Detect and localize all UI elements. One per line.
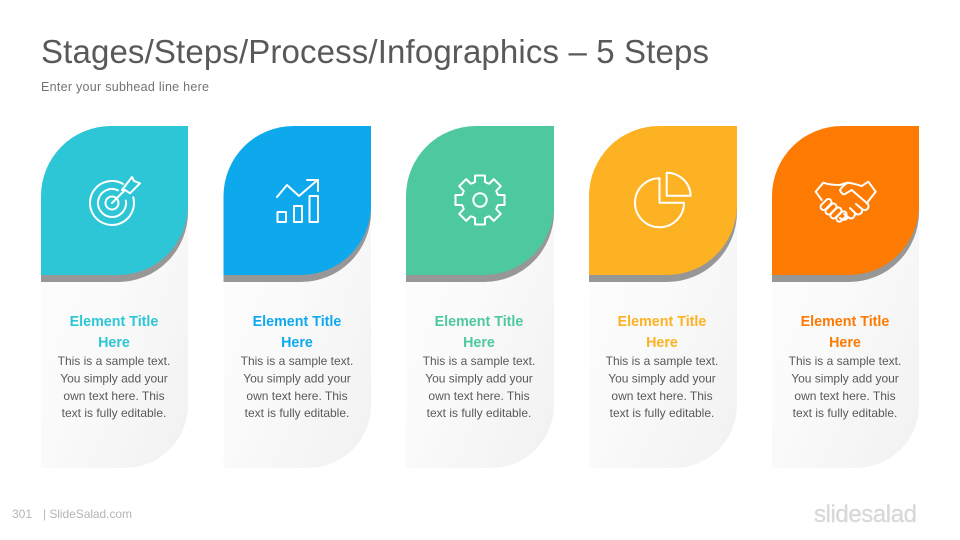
step 5 title: Here [829,335,861,351]
step 5 text: own text here. This [794,389,896,403]
step 4 title: Element Title [618,314,706,330]
colour leaf 4 [589,126,737,275]
step 3 text: text is fully editable. [427,406,531,420]
step 4 title: Here [646,335,678,351]
colour leaf 5 [772,126,919,275]
card shadow 1 [41,200,188,282]
step 2 text: You simply add your [243,371,351,385]
footer site name: | SlideSalad.com [43,507,132,521]
step 2 text: own text here. This [246,389,348,403]
colour leaf 3 [406,126,554,275]
step 2 text: text is fully editable. [245,406,349,420]
step 3 text: This is a sample text. [423,354,535,368]
step 2 title: Element Title [253,314,341,330]
step 1 text: own text here. This [63,389,165,403]
panel: step 5 [772,126,919,468]
step 4 text: own text here. This [611,389,713,403]
icon: handshake [816,182,876,223]
step 3 title: Here [463,335,495,351]
subhead: Enter your subhead line here [41,80,209,94]
panel: step 2 [224,126,371,468]
step 5 title: Element Title [801,314,889,330]
step 3 title: Element Title [435,314,523,330]
card shadow 5 [772,200,919,282]
card background 5 [772,126,919,468]
colour leaf 2 [224,126,371,275]
icon: target with arrow [90,177,140,225]
card background 3 [406,126,554,468]
title: Stages/Steps/Process/Infographics – 5 Steps [41,33,709,70]
panel: step 3 [406,126,554,468]
step 2 title: Here [281,335,313,351]
card background 4 [589,126,737,468]
step 1 text: This is a sample text. [58,354,170,368]
icon: pie chart [635,173,691,227]
step 4 text: text is fully editable. [610,406,714,420]
step 1 text: text is fully editable. [62,406,166,420]
panel: step 4 [589,126,737,468]
step 1 text: You simply add your [60,371,168,385]
logo wordmark: slidesalad [814,501,917,528]
step 1 title: Here [98,335,130,351]
panel: step 1 [41,126,188,468]
card shadow 3 [406,200,554,282]
step 5 text: text is fully editable. [793,406,897,420]
colour leaf 1 [41,126,188,275]
step 5 text: You simply add your [791,371,899,385]
step 3 text: own text here. This [428,389,530,403]
card background 1 [41,126,188,468]
icon: gear [456,176,504,224]
icon: rising bar chart [277,180,318,222]
card shadow 4 [589,200,737,282]
card background 2 [224,126,371,468]
card shadow 2 [224,200,371,282]
step 3 text: You simply add your [425,371,533,385]
footer page number: 301 [12,507,32,521]
step 4 text: This is a sample text. [606,354,718,368]
step 1 title: Element Title [70,314,158,330]
step 4 text: You simply add your [608,371,716,385]
step 5 text: This is a sample text. [789,354,901,368]
step 2 text: This is a sample text. [241,354,353,368]
